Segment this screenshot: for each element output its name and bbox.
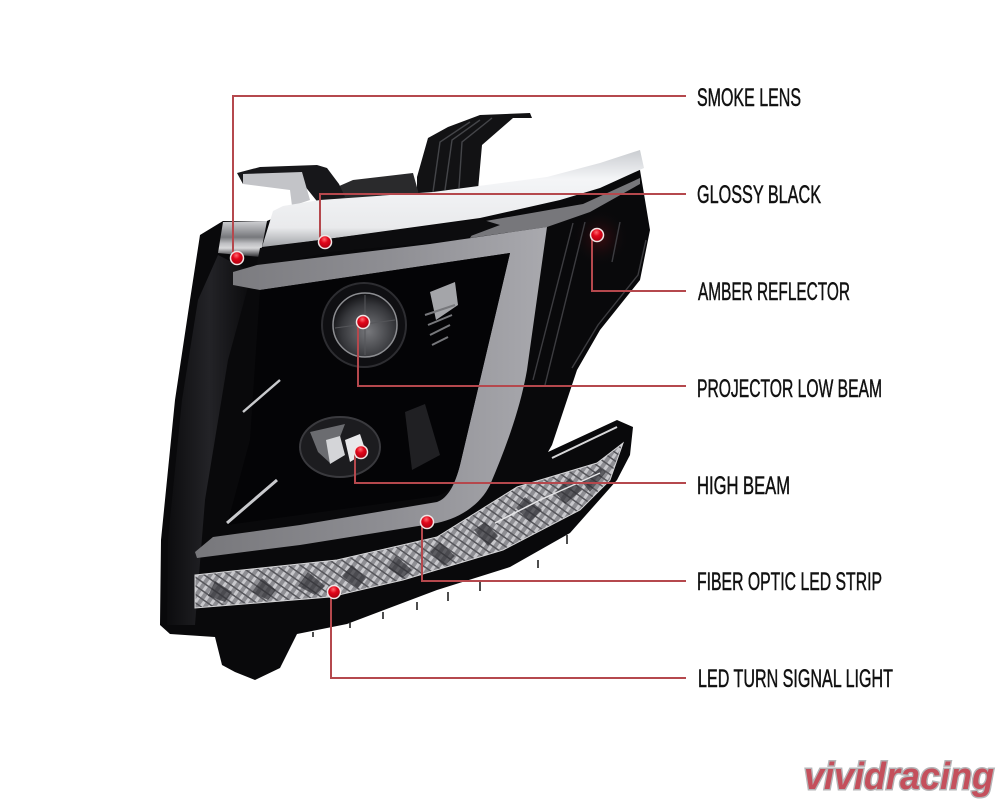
callout: high beam: HIGH BEAM <box>697 472 790 500</box>
callout: high beam <box>354 446 790 500</box>
led strip <box>195 443 623 608</box>
high beam <box>300 417 380 477</box>
tall mounting bracket <box>417 113 532 198</box>
mesh vent <box>337 173 420 205</box>
lens streaks <box>227 380 280 523</box>
projector reflector <box>425 282 458 345</box>
inner lens window <box>227 253 510 525</box>
callout: fiber optic led strip: FIBER OPTIC LED STRIP <box>697 568 882 596</box>
main housing <box>160 170 650 680</box>
light tube surround <box>195 227 547 558</box>
left bracket <box>237 165 345 206</box>
callout: led turn signal light: LED TURN SIGNAL LIGHT <box>698 665 893 693</box>
callout: amber reflector <box>590 228 850 306</box>
callout: amber reflector: AMBER REFLECTOR <box>698 278 850 306</box>
callout: projector low beam: PROJECTOR LOW BEAM <box>697 375 882 403</box>
lower mounting pins <box>313 535 567 637</box>
chrome top strip <box>262 150 644 247</box>
headlight illustration <box>160 113 650 680</box>
smoke lens corner module <box>218 221 267 257</box>
logo: vividracing: vividracing <box>804 756 994 798</box>
callout: smoke lens: SMOKE LENS <box>697 84 801 112</box>
chrome lower trim <box>470 178 640 238</box>
fiber optic highlight <box>495 473 600 523</box>
callout: projector low beam <box>356 316 882 403</box>
gloss black band <box>256 219 500 268</box>
led strip cells <box>208 468 606 602</box>
amber reflector glow <box>572 210 628 266</box>
housing edge details <box>533 222 646 385</box>
left side lens band <box>167 255 252 625</box>
high beam reflector <box>405 404 440 470</box>
turn signal upper trim <box>552 427 617 458</box>
projector low beam <box>322 283 406 367</box>
callout: led turn signal light <box>328 586 893 693</box>
callout: smoke lens <box>230 84 801 264</box>
callout: glossy black: GLOSSY BLACK <box>697 181 821 209</box>
callout: glossy black <box>318 181 821 248</box>
callout: fiber optic led strip <box>420 516 882 596</box>
